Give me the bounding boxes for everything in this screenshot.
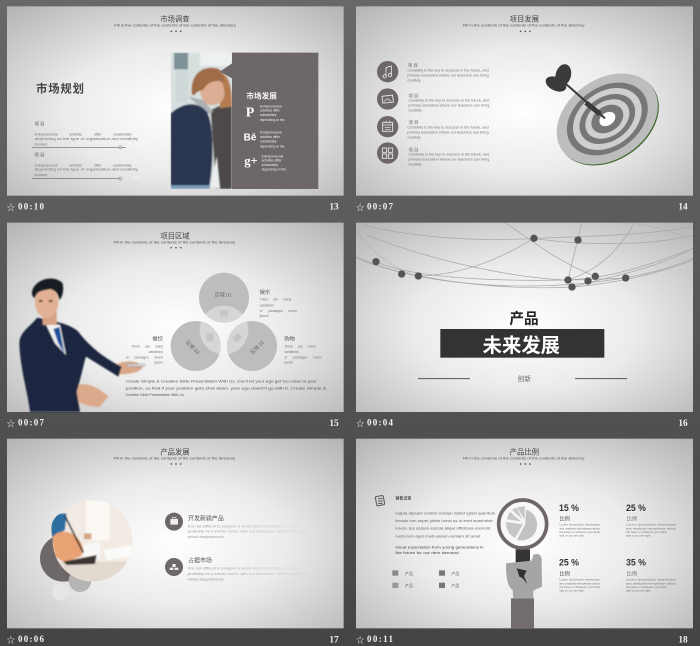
icon: behance: Bē [244,133,257,144]
text: entertainment: variations [260,303,274,307]
stat: 35 percent: any analysis hereplease about [626,581,676,585]
heading: slide 17 [113,448,236,465]
text: entry one: depending on the. [260,118,285,122]
stat: 35 percent: the base or whatever you think [626,585,667,589]
text: item two: primary education where our teachers can bring [408,104,490,108]
legend: 产品 [405,582,413,588]
text block: item one: involved. [35,142,48,146]
text: develop new products [188,514,308,539]
chart: pie in lens [506,506,537,541]
legend: 产品 [405,570,413,576]
text: item two: creativity. [408,109,422,113]
text: item four: creativity. [408,163,422,167]
heading: slide 15 [113,231,236,248]
chart: venn circles: 区域 01 [215,292,232,299]
text: sales record: Gapla dipsam voloris vendan debet ignist quentum [395,511,495,515]
icon: picture [377,88,398,110]
footer: slide 14 [356,201,688,213]
text: sales record: lorem, Ips assum essola aliqui officiisea esenold [395,527,490,531]
panel: slide 14 project development [356,6,693,213]
icon: blocks [165,558,183,576]
stat: 15 percent: any analysis hereplease about [559,526,600,530]
heading: slide 13 [114,15,236,32]
text: entry two: subsantially [260,140,277,144]
chart: target [539,55,676,184]
text: entry one: subsantially [260,113,277,117]
text: shopping: ipsum [284,361,293,365]
heading: slide 14: 项目发展 [510,15,540,24]
text: develop new products: probably be a kinder world: with out demands, without anxieties [188,530,308,534]
text: sales record: the future for our dem demand [395,551,459,555]
text: item three [407,120,489,140]
text: entry two: depending on the. [260,144,285,148]
heading: product: 产品 [509,311,539,328]
text: entry three [262,154,287,172]
panel: slide 18 product ratio [356,439,693,645]
text block: item one: depending on the type of organization and creativity [35,137,138,141]
stat: 25 percent bottom: the base or whatever you think [559,585,601,589]
text block: item one: 项 目 [35,122,45,128]
text: dining [126,335,164,365]
stat: 15 percent [559,503,601,537]
footer: slide 16: 00:04 [367,418,393,428]
stat: 15 percent: right on you see right. [559,533,585,537]
text: entertainment: 娱乐 [260,288,271,296]
footer: slide 17: 17 [329,635,339,645]
footer: slide 17: ☆ [7,635,16,645]
text: occupy market: probably be a kinder world: with out demands, without anxieties [188,572,308,576]
stat: 25 percent top: right on you see right. [626,533,651,537]
text: entry two: Entrepreneurial [260,131,282,135]
text: shopping: variations [284,350,299,354]
text: item three: 项 目 [409,120,419,126]
subtitle: innovation: 创新 [518,374,531,383]
footer: slide 17 [7,634,339,645]
text: item three: Creativity is the key to success in the future, and [407,126,489,130]
legend: 产品 [451,570,459,576]
footer: slide 16 [356,418,688,429]
icon: pinterest: P [246,106,255,121]
text: sales record: nusto lum apet modi easum veniam sit amet [395,534,480,538]
stat: 25 percent top: any analysis hereplease about [626,526,676,530]
text: sales record: Great expectation from young generations in [395,545,484,549]
footer: slide 18: 18 [678,635,688,645]
text block: item one: Entrepreneurial activities differ substantially [35,132,132,136]
heading: slide 18: 产品比例 [510,448,539,457]
panel: slide 16 future development [356,223,693,429]
footer: slide 18: 00:11 [367,634,393,644]
text: item one: 项 目 [408,63,418,69]
stat: 25 percent top: 比例 [627,514,637,522]
stat: 25 percent bottom [559,558,601,592]
panel: market development [220,53,318,189]
text: entry one: Entrepreneurial [260,104,282,108]
decorative circles [40,535,91,600]
chart: venn circles [171,273,277,371]
panel: market development: 市场发展 [246,90,277,100]
footer: slide 13: 13 [329,203,339,213]
stat: 25 percent bottom: 比例 [559,569,570,577]
text: entry one [260,104,285,122]
text: develop new products: It is not difficult to imagine a world short of ambition. It would [188,524,301,528]
icon: google plus: g+ [244,154,258,168]
text: shopping: of passages lorem [284,356,322,360]
text: dining: ipsum [154,361,163,365]
heading: slide 14 [463,15,585,32]
progress bar: item one [32,144,141,149]
chart: venn circles: 区域 02 [249,339,266,356]
text: entertainment: of passages lorem [260,309,297,313]
text block: item two: involved. [35,173,48,177]
text block: item two: Entrepreneurial activities differ substantially [35,163,132,167]
footer: slide 15: 15 [329,419,339,429]
icon: calendar [377,116,398,137]
illustration: hand with magnifier [499,500,547,628]
stat: 25 percent top: 25 % [626,503,647,513]
icon: grid [377,142,398,164]
text: entry two [260,131,285,148]
text block: item two: depending on the type of organization and creativity [35,168,138,172]
photo: couple [171,53,234,189]
footer: slide 18 [356,634,688,645]
text: occupy market: 占据市场 [188,556,212,564]
footer: slide 15: ☆ [7,419,16,429]
chart: venn circles: 区域 03 [184,339,201,356]
stat: 15 percent: 比例 [559,514,570,522]
panel: slide 13 market planning [7,6,344,213]
footer: slide 16: 16 [678,419,688,429]
panel: slide 17 product development [7,439,344,645]
text: shopping: There are many [284,344,316,348]
footer: slide 18: ☆ [356,635,365,645]
text: item four: primary education where our teachers can bring [408,158,490,162]
text: entertainment: There are many [260,298,291,302]
heading: slide 15: 项目区域 [160,231,190,240]
text: sales record: 销售记录 [395,495,411,501]
text: occupy market: It is not difficult to imagine a world short of ambition. It would [188,567,301,571]
text: dining: variations [149,350,163,354]
text: item one: creativity. [407,79,421,83]
panel: slide 15 project area [7,223,344,429]
text: sales record [395,495,495,555]
banner: future development: 未来发展 [483,334,560,357]
text: entry one: activities differ [260,109,280,113]
text: market planning title: 市场规划 [36,82,84,96]
text: occupy market [188,556,308,581]
stat: 35 percent: right on you see right. [626,588,651,592]
stat: 25 percent top: Lorem Ipsumdolor sitametque [626,523,677,527]
stat: 25 percent top: the base or whatever you think [626,530,667,534]
stat: 15 percent: the base or whatever you think [559,530,601,534]
footer: slide 17: 00:06 [18,634,44,644]
footer: slide 14: 14 [678,203,688,213]
stat: 25 percent bottom: Lorem Ipsumdolor sitametque [559,578,600,582]
text: entry three: depending on the. [262,168,287,172]
footer: slide 13 [7,201,339,213]
text: item four [408,147,490,167]
footer: slide 15: 00:07 [18,418,44,428]
stat: 25 percent top [626,503,677,537]
text: occupy market: without disappointments. [188,577,224,581]
heading: slide 14: Fill in the contents of the contents of the contents of the directory [463,23,585,27]
text: dining: of passages lorem [126,356,163,360]
stat: 35 percent [626,558,677,592]
text: develop new products: without disappointments. [188,535,224,539]
progress bar: item two [32,175,141,180]
progress bar: item one: 60% [133,144,141,149]
icon: sales record [375,495,385,506]
text: dining: There are many [131,344,163,348]
photo: businessman [19,278,145,412]
icon: dart [543,62,605,118]
stat: 15 percent: Lorem Ipsumdolor sitametque [559,523,600,527]
text: dining: 餐饮 [152,335,164,343]
banner: future development [440,329,604,358]
chart: network lines [356,223,693,291]
footer: slide 14: 00:07 [367,201,393,211]
heading: slide 15: Fill in the contents of the contents of the contents of the directory [113,240,236,244]
stat: 25 percent bottom: right on you see right. [559,588,585,592]
text: item four: 项 目 [409,147,419,153]
footer: slide 14: ☆ [356,202,365,212]
text: item three: primary education where our teachers can bring [407,131,489,135]
stat: 35 percent: 35 % [626,558,647,568]
text: shopping [284,335,322,365]
footer: slide 16: ☆ [356,419,365,429]
text: description: Creative Slide Presentation With Us. [126,393,185,397]
footer: slide 13: ☆ [7,202,16,212]
text: entry two: activities differ [260,135,280,139]
text: item three: creativity. [407,136,421,140]
text: entry three: subsantially [262,163,279,167]
text: item two: Creativity is the key to success in the future, and [408,99,489,103]
text: entry three: Entrepreneurial [262,154,284,158]
text: shopping: 购物 [284,335,296,343]
legend [392,570,459,588]
text: entry three: activities differ [262,159,282,163]
text block: item two: 项 目 [35,153,45,159]
heading: slide 13: Fill in the contents of the contents of the contents of the directory [114,23,236,27]
text: item one: Creativity is the key to success in the future, and [407,69,489,73]
stat: 25 percent bottom: any analysis hereplease about [559,581,600,585]
heading: slide 13: 市场调查 [160,15,190,24]
stat: 15 percent: 15 % [559,503,580,513]
text: description [126,379,327,397]
text: item four: Creativity is the key to success in the future, and [408,153,489,157]
text block: item two [35,153,138,177]
heading: slide 17: 产品发展 [160,448,190,457]
legend: 产品 [451,582,459,588]
photo: writing hand [50,500,133,583]
stat: 35 percent: 比例 [627,569,637,577]
heading: slide 18: Fill in the contents of the contents of the contents of the directory [463,457,585,461]
text: item two: 项 目 [409,93,419,99]
stat: 35 percent: Lorem Ipsumdolor sitametque [626,578,677,582]
stat: 25 percent bottom: 25 % [559,558,580,568]
text: item one: primary education where our teachers can bring [407,74,489,78]
text: sales record: temalo lum super jobbs hunsi us ut enet seashelsb [395,519,493,523]
text: entertainment [260,288,297,318]
text: description: position, so that if your position gets shot down, your ego doesn't go with it. Create Simple & [126,386,327,390]
text: entertainment: ipsum [260,314,269,318]
text: item two [408,93,490,113]
text: description: Create Simple & Creative Slide Presentation With Us. Don't let your ego get too close to your [126,379,318,383]
icon: briefcase [165,513,183,531]
icon: music [377,61,398,82]
text block: item one [35,122,138,146]
heading: slide 18 [463,448,585,465]
text: develop new products: 开发新颖产品 [188,514,224,522]
footer: slide 13: 00:10 [18,201,44,211]
footer: slide 15 [7,418,339,429]
progress bar: item two: 80% [133,175,141,180]
text: item one [407,63,489,83]
heading: slide 17: Fill in the contents of the contents of the contents of the directory [113,457,236,461]
